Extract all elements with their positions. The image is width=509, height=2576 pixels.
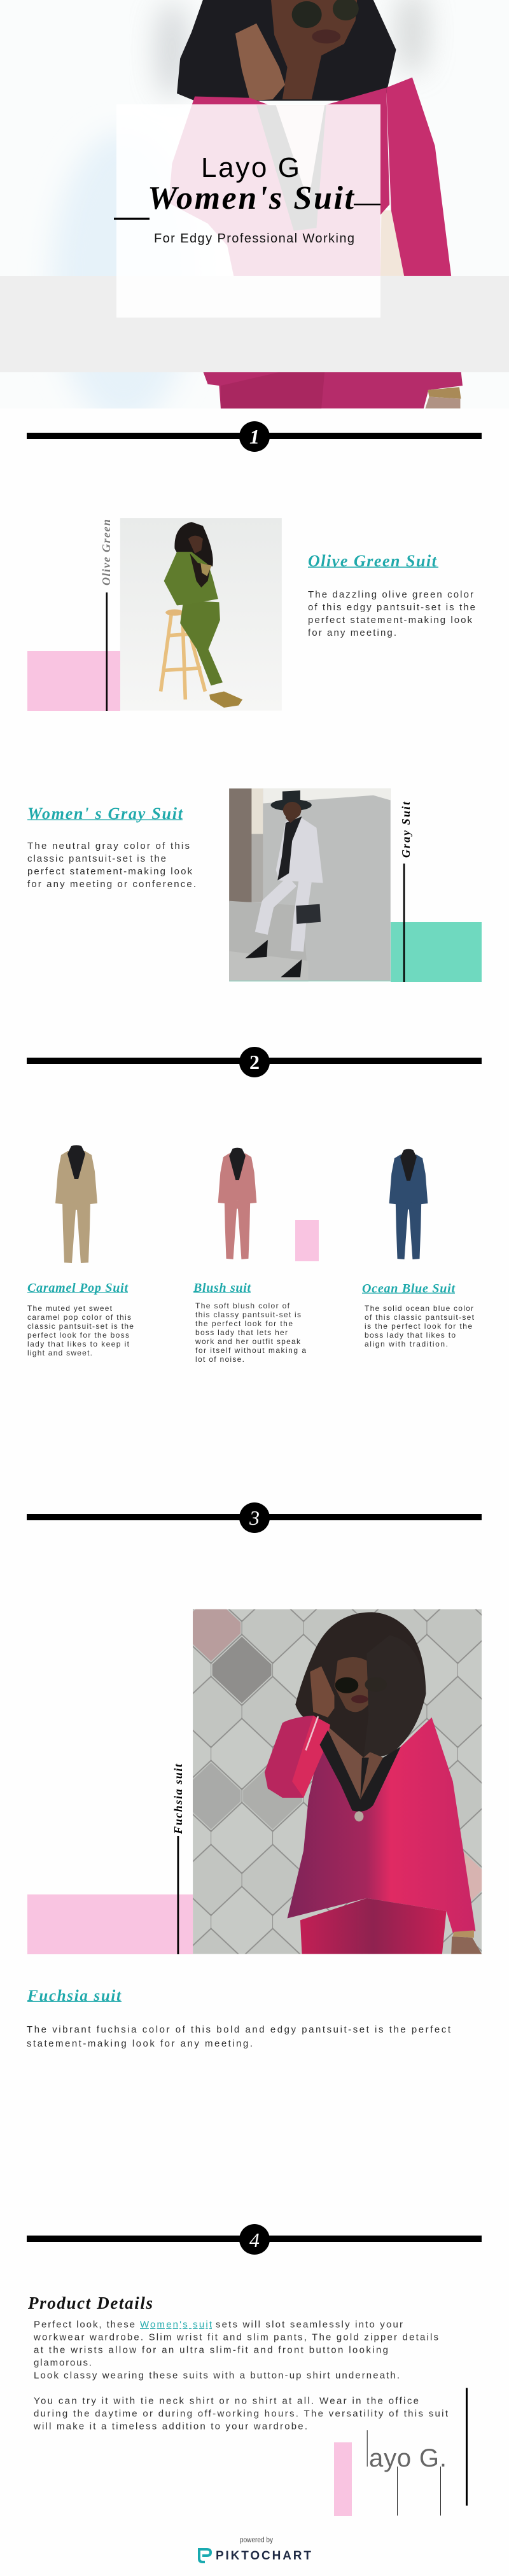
column: ocean blue suit: Ocean Blue Suit [362,1282,456,1296]
icon: piktochart mark [199,2549,211,2562]
gray suit photo [229,788,391,981]
text: olive description: perfect statement-making look [308,615,472,626]
piktochart logo [199,2549,311,2563]
title rule left [114,218,150,220]
text: gray description: classic pantsuit-set is the [27,853,166,864]
title panel [114,104,380,318]
text: product details: sets will slot seamlessly into your [216,2319,403,2330]
text: product details: at the wrists allow for an ultra slim-fit and front button looking [34,2344,388,2356]
vertical rule: signature [466,2388,468,2506]
text: product details: workwear wardrobe. Slim wrist fit and slim pants, The gold zipper details [33,2332,438,2343]
text: gray description: perfect statement-making look [27,866,192,877]
text: product details: will make it a timeless addition to your wardrobe. [33,2421,307,2432]
text: olive description: The dazzling olive green color [308,589,473,600]
text: olive description [308,589,475,638]
title: Layo G: Layo G [201,152,300,183]
column: blush suit: for itself without making a [195,1346,306,1355]
section divider 1: 1 [249,425,260,448]
column: blush suit: lot of noise. [195,1355,244,1364]
text: product details: Perfect look, these [34,2319,135,2330]
column: ocean blue suit: is the perfect look for the [365,1322,472,1331]
text: product details: during the daytime or during off-working hours. The versatility of this suit [34,2408,449,2419]
text: product details: glamorous. [34,2357,92,2369]
hero photo: woman in fuchsia suit [41,0,463,409]
text: fuchsia description: statement-making look for any meeting. [27,2038,253,2049]
text: gray description [27,841,196,890]
column: ocean blue suit: The solid ocean blue color [365,1304,473,1313]
column: caramel pop suit [27,1281,134,1357]
column: caramel pop suit: caramel pop color of this [27,1313,131,1322]
gray band [0,276,509,372]
olive green suit photo [120,518,282,711]
rotated label: Fuchsia suit: Fuchsia suit [172,1763,185,1835]
heading: Olive Green Suit: Olive Green Suit [308,552,437,570]
powered by label: powered by [240,2535,273,2544]
signature logo: layo G.: ayo G. [369,2444,447,2472]
section divider 2: 2 [249,1051,260,1074]
column: caramel pop suit: lady that likes to keep it [27,1340,130,1348]
text: fuchsia description: The vibrant fuchsia color of this bold and edgy pantsuit-set is the perfect [27,2024,451,2035]
rotated label: Gray Suit: Gray Suit [400,801,412,858]
column: blush suit: Blush suit [193,1281,251,1295]
pink block: signature [334,2442,352,2516]
blush suit [218,1148,256,1259]
title rule right [354,204,380,205]
text: olive description: of this edgy pantsuit-set is the [308,602,475,613]
text: product details: Women's suit [140,2319,213,2330]
title: Women's Suit: Women's Suit [148,180,355,216]
heading: Product Details: Product Details [27,2293,153,2313]
column: caramel pop suit: The muted yet sweet [27,1304,113,1313]
column: caramel pop suit: perfect look for the boss [27,1331,129,1340]
fuchsia suit photo [181,1595,487,1954]
section divider 4: 4 [249,2229,260,2251]
rotated label: Olive Green: Olive Green [100,519,113,585]
text: fuchsia description [27,2024,451,2049]
section divider 1 [27,421,482,452]
pink block: fuchsia [27,1894,193,1954]
section divider 3 [27,1502,482,1533]
signature logo: layo G. [367,2430,447,2516]
text: product details: Look classy wearing these suits with a button-up shirt underneath. [34,2370,400,2381]
section divider 4 [27,2224,482,2255]
section divider 3: 3 [249,1506,260,1529]
column: ocean blue suit [362,1282,475,1348]
column: ocean blue suit: align with tradition. [365,1340,448,1348]
column: ocean blue suit: boss lady that likes to [365,1331,456,1340]
text: gray description: The neutral gray color of this [27,841,190,851]
vertical rule: olive [106,592,108,711]
tagline: For Edgy Professional Working [154,232,354,246]
column: caramel pop suit: Caramel Pop Suit [27,1281,129,1295]
heading: Fuchsia suit: Fuchsia suit [27,1987,122,2005]
column: blush suit: the perfect look for the [195,1319,293,1328]
column: blush suit: this classy pantsuit-set is [195,1310,301,1319]
column: ocean blue suit: of this classic pantsuit-set [365,1313,475,1322]
text: product details [33,2319,449,2432]
vertical rule: fuchsia [177,1836,179,1954]
wordmark: PIKTOCHART [216,2549,311,2563]
column: blush suit: The soft blush color of [195,1301,290,1310]
section divider 2 [27,1047,482,1077]
column: caramel pop suit: classic pantsuit-set is the [27,1322,134,1331]
column: caramel pop suit: light and sweet. [27,1348,92,1357]
vertical rule: gray [403,864,405,982]
column: blush suit: work and her outfit speak [195,1337,301,1346]
teal block: gray [391,922,482,982]
text: gray description: for any meeting or conference. [27,879,196,890]
text: olive description: for any meeting. [308,627,396,638]
column: blush suit: boss lady that lets her [195,1328,288,1337]
heading: Women's Gray Suit: Women' s Gray Suit [27,804,183,823]
text: product details: You can try it with tie neck shirt or no shirt at all. Wear in the office [34,2395,419,2407]
pink block: olive [27,651,120,711]
column: blush suit [193,1281,306,1364]
caramel suit [55,1145,97,1263]
pink block: suits [295,1220,319,1261]
ocean blue suit [389,1149,428,1259]
